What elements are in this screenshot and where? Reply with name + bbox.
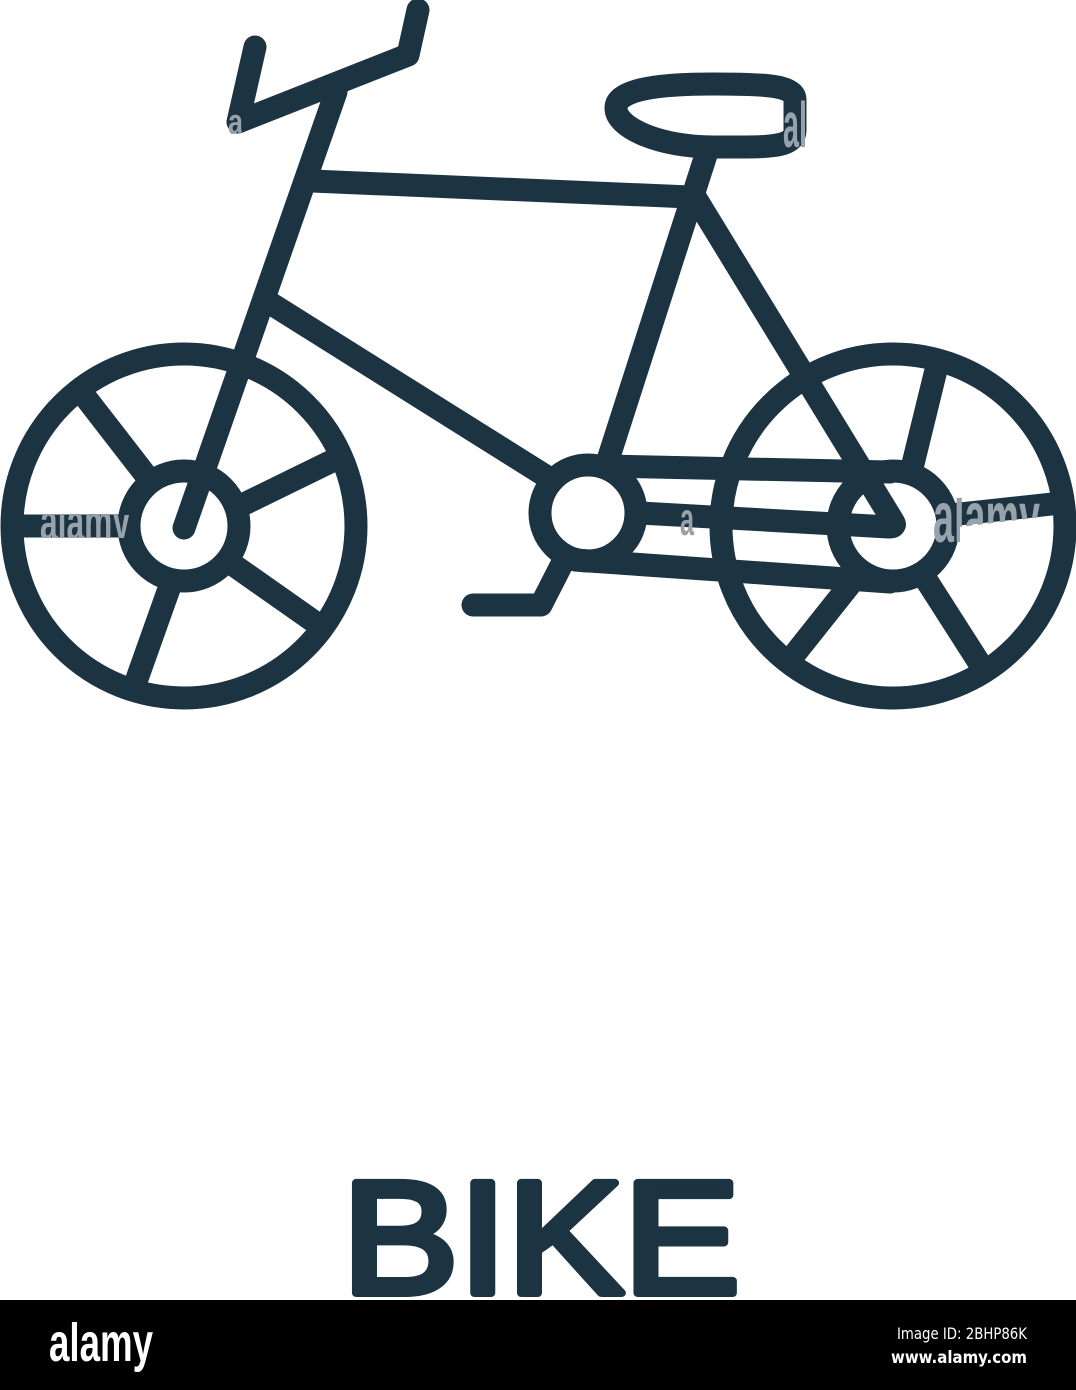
website: www.alamy.com <box>891 1348 1027 1368</box>
chain <box>575 466 890 582</box>
footer logo: alamy <box>49 1313 153 1373</box>
image id: Image ID: 2BHP86K <box>897 1324 1027 1343</box>
watermark fragments: a <box>228 101 244 142</box>
watermark fragments: alamy <box>40 492 130 552</box>
pedal <box>473 556 566 605</box>
footer bar <box>0 1300 1076 1390</box>
saddle <box>616 84 795 147</box>
watermark fragments: al <box>783 89 807 161</box>
crank <box>540 465 636 561</box>
frame and fork <box>184 92 894 528</box>
left wheel <box>12 354 356 698</box>
watermark fragments: a <box>680 493 694 545</box>
watermark fragments <box>40 89 1040 558</box>
handlebar <box>238 10 418 122</box>
right wheel <box>721 354 1065 698</box>
title: BIKE: BIKE <box>342 1148 740 1327</box>
icon: bicycle <box>12 10 1065 698</box>
